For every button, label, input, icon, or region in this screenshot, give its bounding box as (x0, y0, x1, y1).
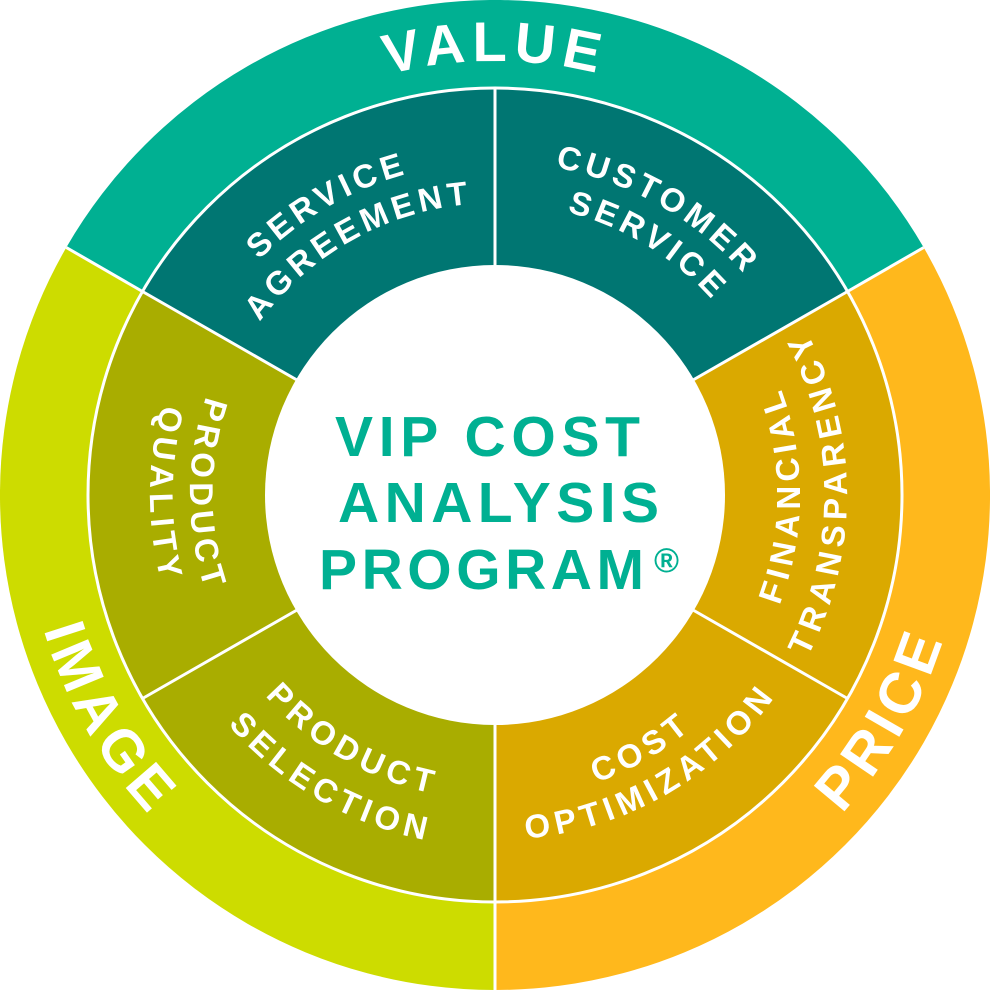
label: image: IMAGE (44, 621, 176, 813)
label: cost optimization: COST (592, 712, 684, 780)
center title: VIP COST (335, 405, 640, 469)
segment: cost optimization (495, 495, 848, 902)
label: cost optimization: OPTIMIZATION (526, 686, 772, 838)
label: financial transparency (758, 340, 848, 650)
label: product selection: PRODUCT (266, 682, 436, 792)
label: value: VALUE (380, 22, 602, 72)
center title (319, 405, 679, 602)
registered mark: ® (654, 542, 679, 580)
segment: customer service (495, 88, 848, 495)
segment: product selection (142, 495, 495, 902)
center circle (265, 265, 725, 725)
center title: PROGRAM (319, 538, 644, 602)
label: product quality: PRODUCT (190, 398, 228, 583)
center title: ANALYSIS (338, 471, 659, 535)
label: financial transparency: FINANCIAL (758, 390, 800, 604)
outer ring: image (0, 248, 495, 990)
outer ring: price (495, 248, 990, 990)
label: price: PRICE (814, 631, 942, 812)
label: customer service: CUSTOMER (558, 147, 756, 272)
label: service agreement: SERVICE (247, 153, 404, 256)
label: product quality (150, 398, 228, 583)
segment: financial transparency (495, 292, 902, 698)
label: product selection: SELECTION (231, 713, 428, 840)
label: customer service: SERVICE (570, 192, 727, 298)
label: product quality: QUALITY (150, 408, 182, 574)
label: financial transparency: TRANSPARENCY (787, 340, 848, 650)
label: service agreement: AGREEMENT (248, 182, 466, 322)
segment: service agreement (142, 88, 495, 495)
segment: product quality (88, 292, 495, 698)
outer ring: value (66, 0, 924, 495)
